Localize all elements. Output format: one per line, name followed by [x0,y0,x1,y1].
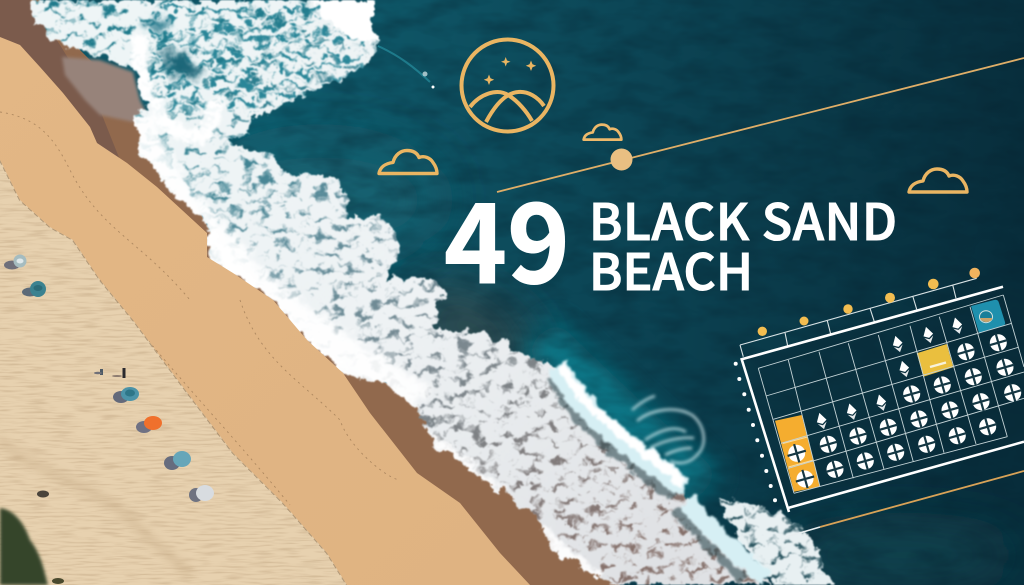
crystal icons [815,316,964,431]
icon: beach emblem with stars and dunes [462,40,554,132]
foam patch beyond the breaker [718,496,836,585]
calendar header row [740,278,977,357]
calendar frame [742,287,1024,512]
dry sand beach [0,37,530,585]
breaker wave crest [550,365,765,580]
header gold dots [758,268,980,336]
calendar panel shading [742,287,1024,508]
round quartered icons [785,331,1024,491]
lower accent line [786,471,1024,537]
blue highlighted cell [971,300,1005,333]
orange highlighted cells [775,415,820,492]
title number: 49 [444,155,570,315]
title text: BLACK SAND [589,183,897,255]
wet sand band [0,0,620,585]
title text: BEACH [589,233,753,305]
water swirl [632,396,704,463]
gold timeline line with dot [497,58,1024,192]
foam: breaking waves [29,0,772,585]
beach umbrellas and people [4,254,214,502]
left dotted column [734,362,777,502]
calendar chart [734,268,1024,512]
green bush [0,508,64,585]
calendar grid lines [758,295,1024,493]
icon: cloud left [379,150,437,174]
pale dune sand [0,160,347,585]
icon: cloud right [909,169,967,192]
yellow highlighted cell [917,344,953,377]
icon: cloud small [584,125,621,140]
